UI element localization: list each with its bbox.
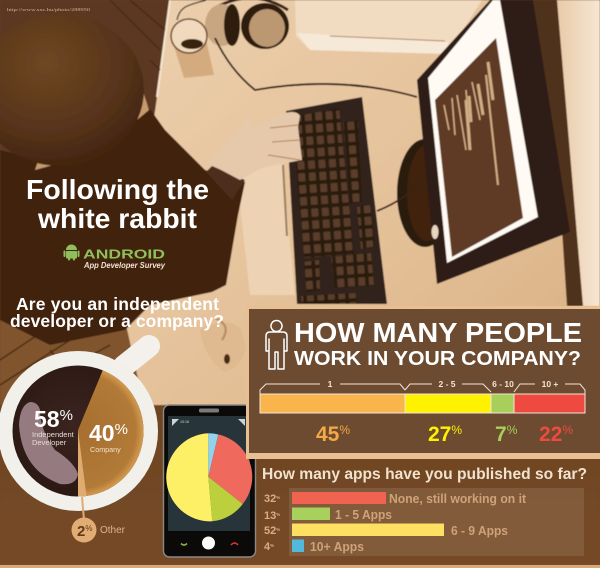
range labels: 1: [328, 379, 333, 389]
bar: 10+ apps: %: [270, 543, 274, 548]
title: white rabbit: [37, 203, 197, 234]
label 40%: %: [115, 421, 128, 438]
bar chart backdrop: [289, 488, 584, 556]
monitor stand: [397, 139, 453, 247]
percent values: 27: [428, 423, 451, 446]
bar: 6-9 apps: 52: [264, 525, 276, 537]
label 2% other: Other: [100, 525, 126, 536]
phone body: [164, 405, 256, 557]
headphones: [205, 0, 289, 49]
percent values: [316, 423, 573, 446]
heading: [294, 317, 582, 370]
bar: 1-5 apps: [264, 508, 392, 522]
heading: How many apps have you published so far?: [262, 466, 587, 483]
bar: 6-9 apps: [264, 524, 508, 538]
coffee cup pie chart: [0, 346, 158, 542]
slice: company 40%: [78, 370, 144, 496]
label 58%: 58: [34, 406, 60, 432]
bottom edge strip: [0, 565, 600, 568]
bar: 10+ apps: 4: [264, 541, 270, 553]
monitor cable: [377, 178, 426, 211]
cup handle: [124, 346, 149, 366]
panel frame: [246, 306, 600, 459]
label 58%: [32, 406, 75, 447]
keyboard: [286, 97, 387, 304]
bar: none: [264, 492, 527, 506]
man: sweater: [0, 95, 245, 345]
pie slice: 1-5 apps 13%: [208, 477, 243, 521]
pie slice: none 32%: [208, 434, 252, 504]
monitor: [417, 0, 570, 284]
bar: none: %: [276, 495, 280, 500]
coffee mug on desk: [171, 19, 214, 78]
pie slice: 10+ apps 4%: [208, 433, 218, 477]
label 40%: 40: [89, 420, 115, 446]
range brackets: [260, 384, 585, 394]
panel: how many people work in your company: [246, 306, 600, 459]
man: neck: [35, 82, 149, 170]
percent values: %: [507, 423, 518, 437]
stacked bar: [260, 394, 585, 413]
slice: independent developer 58%: [12, 366, 144, 496]
headphone cable: [215, 38, 417, 97]
range labels: 2 - 5: [438, 379, 456, 389]
android wordmark: ANDROID: [83, 246, 165, 262]
man: sleeve cuff: [206, 166, 245, 200]
heading: WORK IN YOUR COMPANY?: [294, 348, 581, 370]
label 2% other: [72, 518, 126, 542]
photo source url: http://www.sxc.hu/photo/288950: [7, 7, 91, 12]
bar: 6-9 apps: 6 - 9 Apps: [451, 524, 508, 538]
desk surface: [125, 0, 600, 410]
bar: none: 32: [264, 493, 276, 505]
desk edge highlight: [157, 0, 170, 97]
label 58%: %: [60, 407, 73, 424]
title: Following the: [26, 174, 209, 205]
bar: 6-9 apps: %: [276, 527, 280, 532]
pie slice: 6-9 apps 52%: [166, 433, 212, 521]
label 58%: Developer: [32, 438, 67, 447]
icon: person: [266, 320, 287, 369]
survey subtitle: App Developer Survey: [83, 261, 166, 270]
cup body: [0, 351, 158, 511]
label 40%: [89, 420, 128, 454]
printer: [295, 0, 482, 54]
pencil and papers: [237, 160, 295, 295]
man: head hair: [0, 14, 144, 166]
question: independent or company: [10, 294, 224, 331]
android logo: [64, 245, 166, 270]
status bar: 15:18: [180, 420, 189, 424]
wall at right: [555, 0, 600, 306]
slice: other 2%: [78, 430, 86, 496]
bar: 10+ apps: 10+ Apps: [310, 540, 364, 554]
label 2% other: %: [85, 524, 92, 533]
shadow near wall: [530, 0, 583, 306]
man: hand on keyboard: [208, 112, 302, 180]
percent values: %: [339, 423, 350, 437]
connector to other: [82, 497, 84, 520]
speaker: [199, 408, 219, 412]
wood floor strips: [0, 0, 165, 400]
range labels: 10 +: [542, 379, 558, 389]
bar: 10+ apps: [264, 540, 364, 554]
percent values: %: [451, 423, 462, 437]
question: independent or company: developer or a company?: [10, 311, 224, 331]
label 58%: Independent: [32, 430, 75, 439]
label 40%: Company: [90, 445, 121, 454]
label 2% other: 2: [77, 523, 85, 540]
percent values: 7: [495, 423, 507, 446]
phone with pie chart: [164, 405, 256, 557]
icon: android robot: [64, 245, 80, 260]
range labels: [328, 379, 558, 389]
lower brown background: [0, 405, 600, 568]
computer mouse: [200, 318, 246, 372]
cup reflection: [19, 402, 78, 484]
phone buttons: [181, 536, 238, 550]
range labels: 6 - 10: [492, 379, 514, 389]
percent values: 45: [316, 423, 339, 446]
percent values: 22: [539, 423, 562, 446]
question: independent or company: Are you an independent: [16, 294, 219, 314]
lower floor: [0, 310, 146, 410]
panel: how many apps published: [262, 466, 587, 556]
bar: none: None, still working on it: [389, 492, 527, 506]
phone screen: [168, 416, 250, 531]
percent values: %: [562, 423, 573, 437]
floor: [0, 0, 600, 410]
title: [26, 174, 209, 234]
status bar: [172, 419, 245, 426]
bar: 1-5 apps: %: [276, 512, 280, 517]
bar: 1-5 apps: 1 - 5 Apps: [335, 508, 392, 522]
bar: 1-5 apps: 13: [264, 510, 276, 522]
heading: HOW MANY PEOPLE: [294, 317, 582, 348]
